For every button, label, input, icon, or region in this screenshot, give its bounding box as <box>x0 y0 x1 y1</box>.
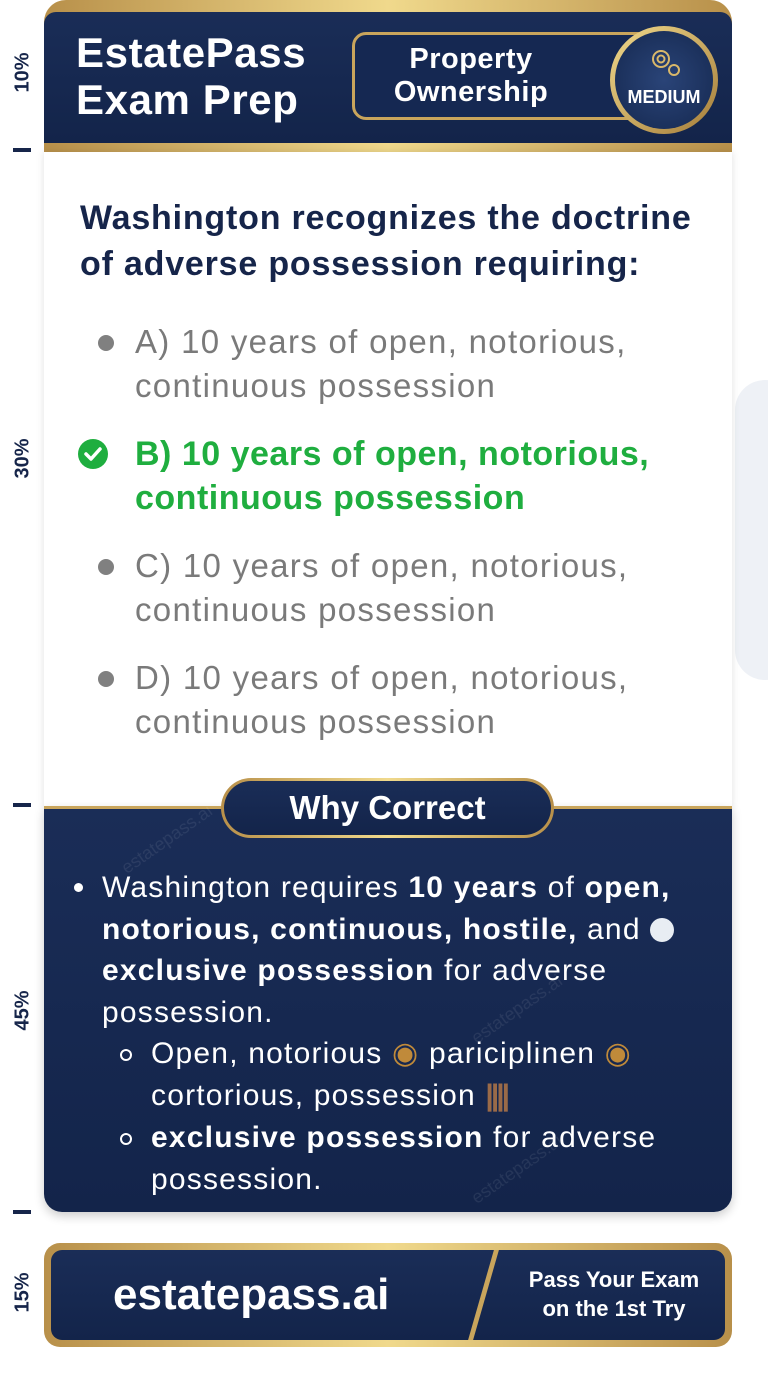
option B correct: B) 10 years of open, notorious, <box>135 435 649 473</box>
explanation panel <box>44 806 732 1212</box>
header title: EstatePass <box>76 29 306 76</box>
explanation bullet <box>74 871 674 1028</box>
option A: A) 10 years of open, notorious, <box>135 323 627 360</box>
footer banner: on the 1st Try <box>542 1296 686 1321</box>
option C: C) 10 years of open, notorious, <box>135 547 628 584</box>
sub bullets: cortorious, possession |||| <box>151 1079 507 1112</box>
why correct pill: Why Correct <box>289 789 486 826</box>
sub bullets: Open, notorious ◉ pariciplinen ◉ <box>151 1037 632 1070</box>
topic badge: Property <box>409 43 533 75</box>
difficulty badge: MEDIUM <box>628 87 700 107</box>
explanation panel: estatepass.ai <box>118 800 216 878</box>
decorative bg shape right <box>735 380 768 680</box>
explanation bullet: possession. <box>102 996 274 1028</box>
option A: continuous possession <box>135 367 496 404</box>
sub bullets <box>120 1037 656 1196</box>
option D: continuous possession <box>135 703 496 740</box>
option B correct <box>78 435 649 517</box>
side label 30%: 30% <box>12 438 34 478</box>
explanation panel: estatepass.ai <box>468 1130 566 1208</box>
icon: gears <box>652 50 680 76</box>
header title <box>76 29 306 123</box>
option C: continuous possession <box>135 591 496 628</box>
why correct pill <box>221 778 554 838</box>
side label 15%: 15% <box>12 1272 34 1312</box>
footer banner <box>44 1243 732 1347</box>
side label 45%: 45% <box>12 990 34 1030</box>
footer banner: estatepass.ai <box>113 1270 389 1319</box>
option D: D) 10 years of open, notorious, <box>135 659 628 696</box>
question text: of adverse possession requiring: <box>80 245 640 283</box>
topic badge <box>352 32 652 120</box>
question card <box>44 152 732 808</box>
question text: Washington recognizes the doctrine <box>80 199 692 237</box>
topic badge: Ownership <box>394 76 548 108</box>
question text <box>80 199 692 283</box>
side label 10%: 10% <box>12 52 34 92</box>
sub bullets: exclusive possession for adverse <box>151 1121 656 1154</box>
difficulty badge <box>610 26 718 134</box>
option C <box>98 547 628 628</box>
icon: check <box>78 439 108 469</box>
header title: Exam Prep <box>76 76 299 123</box>
sub bullets: possession. <box>151 1163 323 1196</box>
option A <box>98 323 627 404</box>
explanation bullet: Washington requires 10 years of open, <box>102 871 671 904</box>
header panel <box>44 0 732 152</box>
option D <box>98 659 628 740</box>
footer banner: Pass Your Exam <box>529 1267 699 1292</box>
explanation bullet: exclusive possession for adverse <box>102 954 607 987</box>
explanation panel: estatepass.ai <box>468 970 566 1048</box>
option B correct: continuous possession <box>135 479 525 517</box>
explanation bullet: notorious, continuous, hostile, and <box>102 912 641 946</box>
